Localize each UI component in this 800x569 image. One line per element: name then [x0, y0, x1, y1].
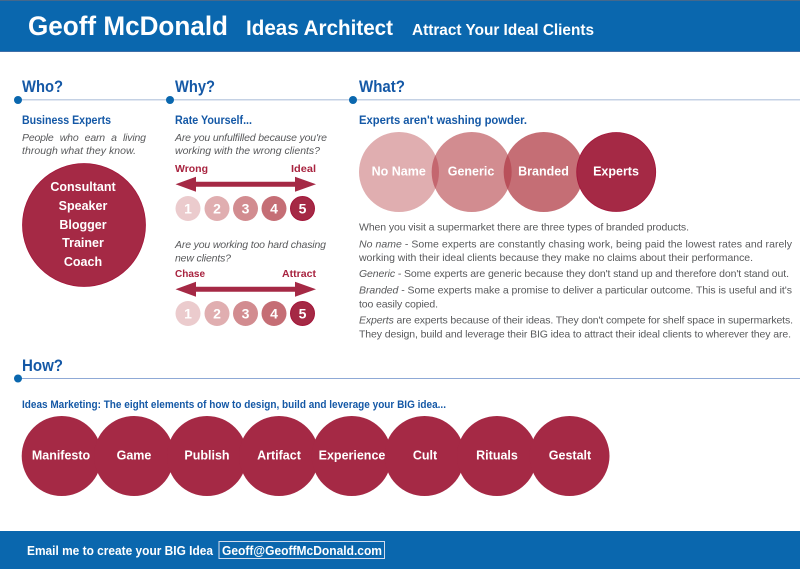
description: who: People who earn a living	[22, 132, 146, 144]
question: working too hard: Are you working too hard chasing	[174, 239, 326, 251]
circles: eight elements: Manifesto	[32, 448, 91, 462]
rating scale 1 to 5: 1	[184, 200, 192, 216]
subheading: washing powder: Experts aren't washing powder.	[359, 115, 527, 127]
scale labels: chase to attract	[175, 268, 316, 280]
subheading: rate yourself: Rate Yourself...	[175, 115, 252, 127]
section rule: how	[14, 374, 800, 382]
heading: how: How?	[22, 357, 63, 375]
overlapping circles: brand types: Generic	[448, 164, 494, 178]
circle: roles list: Consultant	[50, 180, 116, 194]
description: who: through what they know.	[22, 145, 136, 157]
scale labels: chase to attract: Attract	[282, 268, 316, 280]
rating scale 1 to 5: 4	[270, 306, 278, 322]
header banner: Ideas Architect	[246, 17, 393, 40]
footer banner	[0, 531, 800, 569]
rating scale 1 to 5: 1	[184, 306, 192, 322]
body text: three types of brands: too easily copied.	[359, 298, 438, 310]
circles: eight elements: Artifact	[257, 448, 302, 462]
subheading: business experts: Business Experts	[22, 115, 111, 127]
heading: who: Who?	[22, 78, 63, 96]
heading: what: What?	[359, 78, 405, 96]
rating scale 1 to 5: 3	[242, 200, 250, 216]
question: working too hard: new clients?	[175, 252, 231, 264]
circles: eight elements	[22, 416, 609, 496]
circle: roles list: Trainer	[62, 236, 104, 250]
overlapping circles: brand types: Experts	[593, 164, 639, 178]
question: wrong clients: working with the wrong clients?	[175, 145, 320, 157]
circles: eight elements: Gestalt	[549, 448, 592, 462]
rating scale 1 to 5: 5	[299, 200, 307, 216]
scale labels: wrong to ideal: Wrong	[175, 163, 208, 175]
header banner: Geoff McDonald	[28, 11, 228, 41]
rating scale 1 to 5: 2	[213, 200, 221, 216]
rating scale 1 to 5	[176, 196, 314, 221]
arrow: wrong to ideal	[176, 177, 316, 192]
body text: three types of brands: They design, build and leverage their BIG idea to attract their ideal clients to wherever they are.	[359, 328, 791, 340]
overlapping circles: brand types	[359, 132, 656, 212]
panel: why	[174, 78, 327, 326]
scale labels: wrong to ideal	[175, 163, 316, 175]
arrow: chase to attract	[176, 282, 316, 297]
body text: three types of brands: working with their ideal clients because they make no claims about their performance.	[358, 252, 753, 264]
circles: eight elements: Cult	[413, 448, 438, 462]
circles: eight elements: Rituals	[476, 448, 518, 462]
rating scale 1 to 5: 3	[242, 306, 250, 322]
heading: why: Why?	[175, 78, 215, 96]
circle: roles list: Blogger	[59, 218, 107, 232]
footer banner: Email me to create your BIG Idea	[27, 544, 214, 558]
subheading: ideas marketing: Ideas Marketing: The eight elements of how to design, build and leverage your BIG idea...	[22, 399, 446, 411]
circles: eight elements: Publish	[184, 448, 230, 462]
circle: roles list: Coach	[64, 255, 102, 269]
rating scale 1 to 5	[176, 301, 314, 326]
rating scale 1 to 5: 5	[299, 306, 307, 322]
panel: what	[358, 78, 796, 340]
panel: how	[14, 357, 800, 496]
scale labels: chase to attract: Chase	[175, 268, 205, 280]
circle: roles list: Speaker	[59, 199, 107, 213]
circle: roles list	[22, 164, 146, 286]
rating scale 1 to 5: 2	[213, 306, 221, 322]
body text: three types of brands: Branded - Some experts make a promise to deliver a particular outcome. This is useful and it's	[359, 284, 792, 296]
scale labels: wrong to ideal: Ideal	[291, 163, 316, 175]
overlapping circles: brand types: Branded	[518, 164, 569, 178]
body text: three types of brands: Experts are experts because of their ideas. They don't compete for shelf space in supermarkets.	[359, 314, 793, 326]
header banner: Attract Your Ideal Clients	[412, 22, 594, 39]
overlapping circles: brand types: No Name	[372, 164, 426, 178]
body text: three types of brands: No name - Some experts are constantly chasing work, being paid the lowest rates and rarely	[359, 238, 792, 250]
panel: who	[22, 78, 146, 286]
circles: eight elements: Game	[117, 448, 151, 462]
circles: eight elements: Experience	[319, 448, 385, 462]
question: wrong clients: Are you unfulfilled because you're	[174, 132, 327, 144]
body text: three types of brands: When you visit a supermarket there are three types of branded products.	[359, 222, 689, 234]
body text: three types of brands: Generic - Some experts are generic because they don't stand up and therefore don't stand out.	[359, 268, 789, 280]
email box: Geoff@GeoffMcDonald.com	[222, 544, 382, 558]
rating scale 1 to 5: 4	[270, 200, 278, 216]
section rule: top	[14, 96, 800, 104]
header banner	[0, 0, 800, 52]
